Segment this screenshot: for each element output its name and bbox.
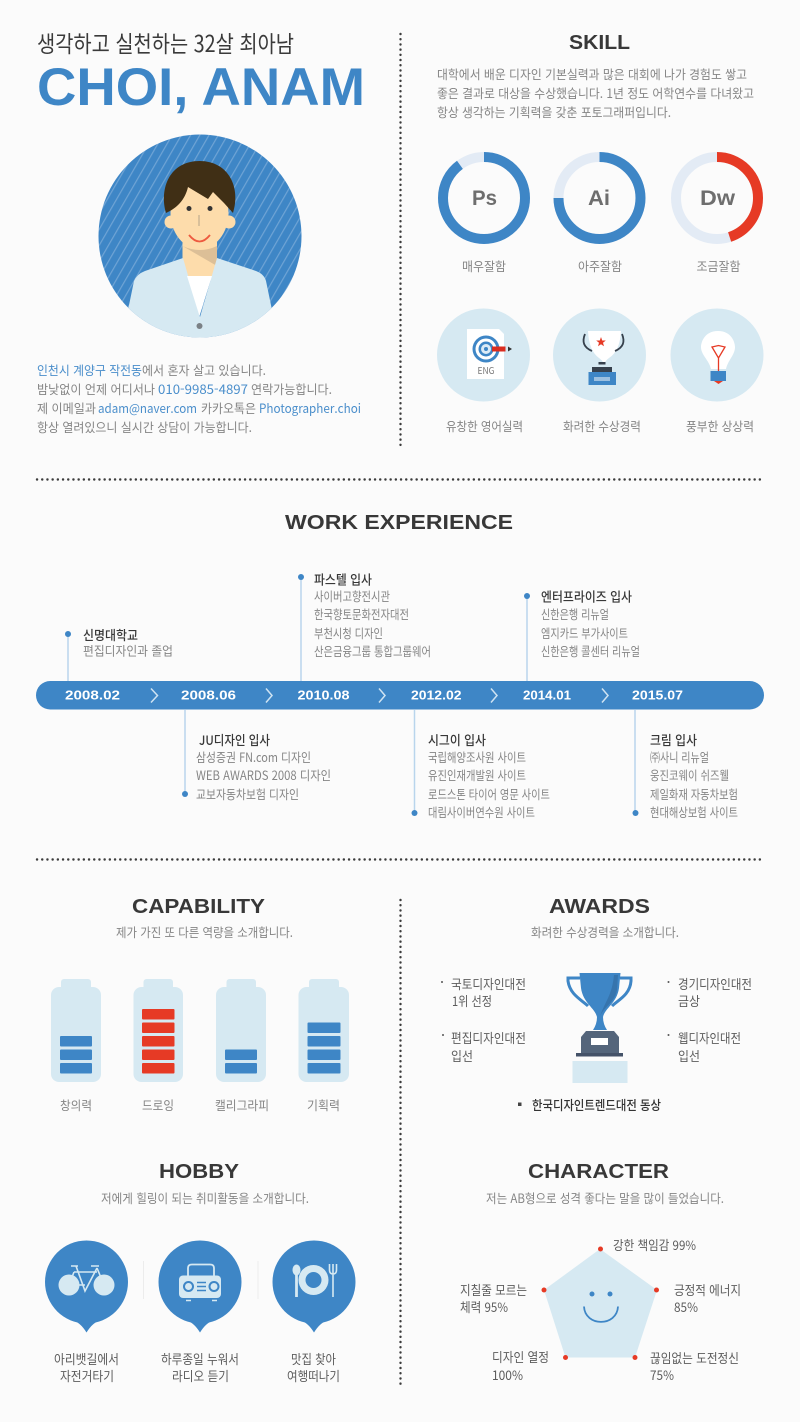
chart labels	[460, 1235, 741, 1384]
timeline entry: 2008.06	[182, 710, 331, 803]
timeline bar: 2014.01	[523, 688, 571, 702]
chart labels: 지칠줄 모르는	[460, 1280, 527, 1299]
timeline entry: 2014.01: 신한은행 리뉴얼	[541, 604, 609, 623]
heading: skill: SKILL	[569, 31, 630, 54]
timeline entry: 2010.08: 한국향토문화전자대전	[314, 604, 409, 623]
timeline entry: 2012.02: 유진인재개발원 사이트	[428, 765, 526, 784]
hobby: bicycle	[45, 1240, 128, 1385]
timeline entry: 2010.08: 사이버고향전시관	[314, 586, 390, 605]
icon: light bulb: 풍부한 상상력	[686, 416, 754, 435]
heading: hobby: HOBBY	[159, 1160, 239, 1183]
heading: awards: AWARDS	[549, 895, 650, 918]
timeline bar: 2012.02	[411, 688, 462, 702]
intro text: 밤낮없이 언제 어디서나	[37, 379, 155, 398]
timeline entry: 2014.01: 엠지카드 부가사이트	[541, 623, 628, 642]
timeline entry: 2012.02	[412, 710, 550, 821]
intro text	[37, 360, 361, 436]
awards list: right: 금상	[678, 991, 700, 1010]
battery: 창의력	[51, 979, 101, 1114]
icon: light bulb	[670, 308, 764, 435]
battery: 기획력	[298, 979, 349, 1114]
awards list: left: 편집디자인대전	[451, 1028, 526, 1047]
awards list: right	[668, 974, 752, 1065]
awards list: left: 입선	[451, 1046, 473, 1065]
awards list: right: 경기디자인대전	[678, 974, 752, 993]
pentagon chart	[542, 1246, 659, 1360]
timeline entry: 2015.07: ㈜사니 리뉴얼	[650, 747, 709, 766]
chart labels: 강한 책임감 99%	[613, 1235, 696, 1254]
timeline entry: 2010.08	[298, 570, 431, 681]
skill description: 대학에서 배운 디자인 기본실력과 많은 대회에 나가 경험도 쌓고	[437, 64, 747, 83]
chart labels: 체력 95%	[460, 1297, 508, 1316]
timeline entry: 2012.02: 시그이 입사	[428, 730, 486, 749]
intro text: adam@naver.com	[98, 398, 197, 417]
smiley face	[584, 1292, 618, 1322]
intro text: 인천시 계양구 작전동	[37, 360, 142, 379]
donut: Ps	[443, 157, 525, 275]
character subtitle: 저는 AB형으로 성격 좋다는 말을 많이 들었습니다.	[486, 1188, 724, 1207]
chart labels: 100%	[492, 1365, 523, 1384]
heading: character: CHARACTER	[528, 1160, 669, 1183]
icon: English target: ENG	[478, 364, 494, 377]
chart labels: 끊임없는 도전정신	[650, 1348, 739, 1367]
donut: Ps: 매우잘함	[462, 256, 506, 275]
portrait illustration	[98, 134, 302, 345]
timeline entry: 2015.07: 제일화재 자동차보험	[650, 784, 738, 803]
donut: Dw: Dw	[700, 187, 736, 210]
timeline entry: 2014.01: 엔터프라이즈 입사	[541, 586, 632, 606]
timeline entry: 2015.07: 크림 입사	[650, 730, 697, 749]
intro text: 연락가능합니다.	[251, 379, 332, 398]
awards list: left: 1위 선정	[452, 991, 492, 1010]
icon: English target: 유창한 영어실력	[446, 416, 523, 435]
chart labels: 75%	[650, 1365, 674, 1384]
timeline entry: 2015.07	[632, 710, 738, 821]
icon: English target	[437, 308, 530, 435]
awards subtitle: 화려한 수상경력을 소개합니다.	[531, 922, 679, 941]
subtitle: 생각하고 실천하는 32살 최아남	[37, 25, 294, 59]
skill description	[437, 64, 754, 121]
timeline entry: 2008.06: WEB AWARDS 2008 디자인	[196, 765, 331, 784]
intro text: 에서 혼자 살고 있습니다.	[142, 360, 266, 379]
timeline entry: 2014.01: 신한은행 콜센터 리뉴얼	[541, 641, 640, 660]
icon: prize cup: 화려한 수상경력	[563, 416, 641, 435]
timeline bar: 2015.07	[632, 688, 683, 702]
battery: 드로잉: 드로잉	[142, 1095, 174, 1114]
hobby: bicycle: 아리뱃길에서	[54, 1349, 119, 1368]
donut: Dw	[676, 157, 758, 275]
timeline entry: 2012.02: 로드스톤 타이어 영문 사이트	[428, 784, 550, 803]
timeline entry: 2010.08: 부천시청 디자인	[314, 623, 383, 642]
timeline entry: 2010.08: 산은금융그룹 통합그룹웨어	[314, 641, 431, 660]
timeline entry: 2008.02: 신명대학교	[83, 625, 138, 644]
chart labels: 긍정적 에너지	[674, 1280, 741, 1299]
hobby: radio: 라디오 듣기	[172, 1366, 229, 1385]
timeline bar: 2010.08	[298, 688, 350, 702]
hobby subtitle: 저에게 힐링이 되는 취미활동을 소개합니다.	[101, 1188, 309, 1207]
timeline bar	[36, 681, 764, 710]
timeline entry: 2012.02: 국립해양조사원 사이트	[428, 747, 526, 766]
timeline entry: 2010.08: 파스텔 입사	[314, 570, 372, 588]
battery: 창의력: 창의력	[60, 1095, 92, 1114]
skill description: 항상 생각하는 기획력을 갖춘 포토그래퍼입니다.	[437, 102, 671, 121]
timeline entry: 2008.06: 교보자동차보험 디자인	[196, 784, 299, 803]
title: name: CHOI, ANAM	[37, 58, 365, 117]
hobby: radio	[158, 1240, 242, 1385]
timeline bar: 2008.02	[65, 688, 120, 702]
donut: Ai: 아주잘함	[578, 256, 622, 275]
awards list: right: 웹디자인대전	[678, 1028, 741, 1047]
timeline entry: 2008.06: JU디자인 입사	[199, 730, 270, 749]
chart labels: 85%	[674, 1297, 698, 1316]
donut: Ai: Ai	[588, 187, 610, 210]
chart labels: 디자인 열정	[492, 1347, 549, 1366]
intro text: 항상 열려있으니 실시간 상담이 가능합니다.	[37, 417, 252, 436]
hobby: radio: 하루종일 누워서	[161, 1349, 239, 1368]
donut: Ps: Ps	[472, 187, 497, 210]
hobby: food: 맛집 찾아	[291, 1349, 336, 1368]
battery: 캘리그라피: 캘리그라피	[215, 1095, 269, 1114]
battery: 캘리그라피	[215, 979, 269, 1114]
timeline entry: 2008.02: 편집디자인과 졸업	[83, 640, 173, 660]
trophy	[568, 973, 631, 1083]
intro text: 카카오톡은	[201, 398, 256, 417]
awards list: right: 입선	[678, 1046, 700, 1065]
intro text: 010-9985-4897	[158, 379, 248, 398]
hobby: food: 여행떠나기	[287, 1366, 340, 1385]
donut: Ai	[558, 157, 640, 275]
battery: 드로잉	[134, 979, 183, 1114]
donut: Dw: 조금잘함	[696, 256, 741, 275]
battery: 기획력: 기획력	[307, 1095, 340, 1114]
icon: prize cup	[553, 308, 646, 435]
intro text: Photographer.choi	[259, 398, 361, 417]
intro text: 제 이메일과	[37, 398, 96, 417]
heading: work experience: WORK EXPERIENCE	[285, 511, 513, 534]
skill description: 좋은 결과로 대상을 수상했습니다. 1년 정도 어학연수를 다녀왔고	[437, 83, 754, 102]
timeline entry: 2014.01	[524, 586, 640, 681]
timeline entry: 2008.02	[65, 625, 173, 681]
heading: capability: CAPABILITY	[132, 895, 265, 918]
awards list: left	[441, 974, 526, 1065]
timeline entry: 2008.06: 삼성증권 FN.com 디자인	[196, 747, 311, 766]
awards list: left: 국토디자인대전	[451, 974, 526, 993]
hobby: food	[272, 1240, 356, 1385]
capability subtitle: 제가 가진 또 다른 역량을 소개합니다.	[116, 922, 293, 941]
timeline entry: 2012.02: 대림사이버연수원 사이트	[428, 802, 535, 821]
timeline bar: 2008.06	[181, 688, 236, 702]
timeline entry: 2015.07: 웅진코웨이 쉬즈웰	[650, 765, 729, 784]
hobby: bicycle: 자전거타기	[60, 1366, 114, 1385]
timeline entry: 2015.07: 현대해상보험 사이트	[650, 802, 738, 821]
award highlight: 한국디자인트렌드대전 동상	[532, 1095, 661, 1114]
